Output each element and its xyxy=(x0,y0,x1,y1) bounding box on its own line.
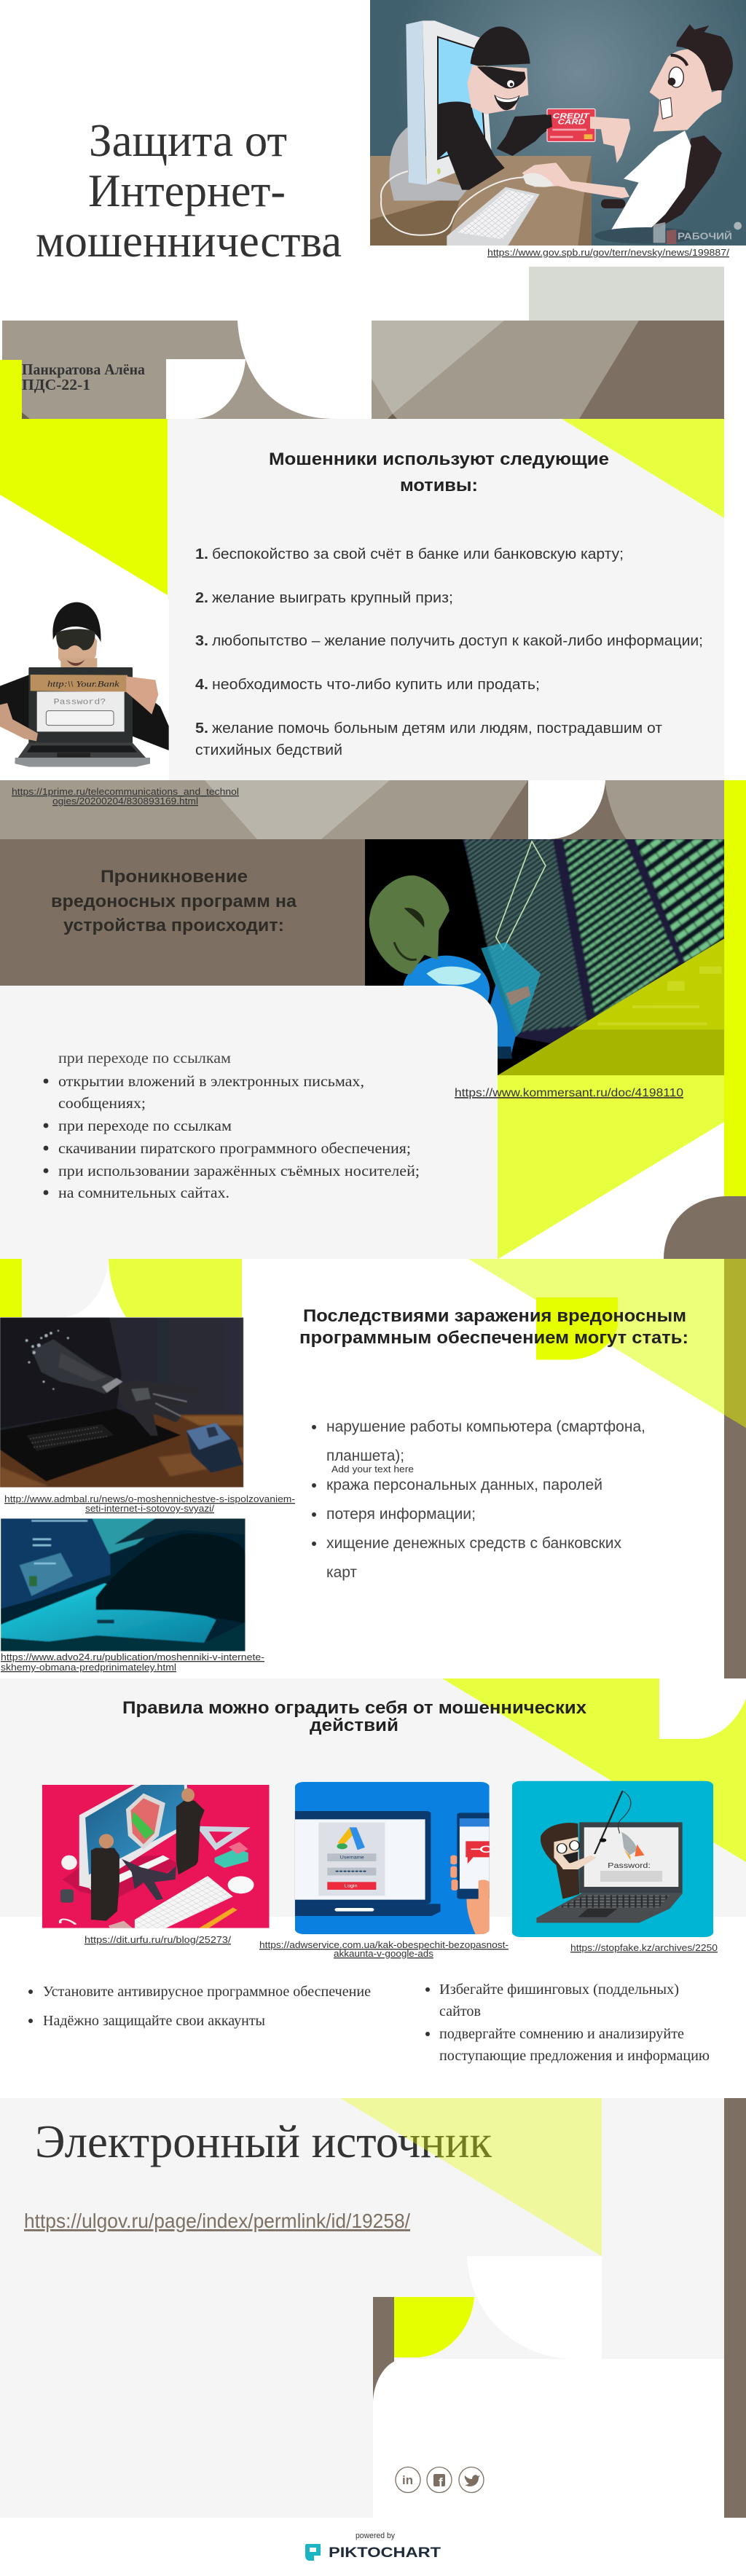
social icons xyxy=(396,2467,484,2493)
bullet list: consequences: планшета); xyxy=(326,1448,404,1464)
lime bar left xyxy=(0,1259,22,1317)
photo: hands typing on a glowing laptop xyxy=(1,1518,246,1652)
bullet list: consequences xyxy=(312,1418,645,1581)
source link: https://1prime.ru/telecommunications_and_technol xyxy=(12,786,239,797)
source link: ogies/20200204/830893169.html xyxy=(52,796,198,806)
source link: skhemy-obmana-predprinimateley.html xyxy=(1,1662,176,1673)
source link: https://ulgov.ru/page/index/permlink/id/19258/ xyxy=(24,2210,410,2232)
author name: ПДС-22-1 xyxy=(22,376,90,393)
illustration: account login on a laptop and phone: Username xyxy=(340,1855,364,1860)
photo: masked man holding a laptop: Password? xyxy=(54,699,106,707)
source links: akkaunta-v-google-ads xyxy=(334,1948,434,1959)
title: Защита от xyxy=(89,114,287,166)
bullet list: rules right xyxy=(425,1982,710,2064)
heading: motives: мотивы: xyxy=(400,476,478,495)
heading: motives: Мошенники используют следующие xyxy=(269,449,609,469)
heading: motives xyxy=(269,449,609,495)
bullet list: rules right: сайтов xyxy=(439,2003,481,2019)
source links: https://adwservice.com.ua/kak-obespechit-bezopasnost- xyxy=(259,1939,509,1950)
numbered list: motives: желание помочь больным детям или людям, пострадавшим от xyxy=(212,720,662,737)
heading: malware entry: вредоносных программ на xyxy=(51,892,297,911)
source link xyxy=(1,1652,264,1673)
heading: malware entry: Проникновение xyxy=(101,867,248,887)
photo: masked man holding a laptop: http:\\ Your.Bank xyxy=(47,679,119,689)
illustration: phishing hacker and password screen xyxy=(512,1781,713,1937)
panel: malware heading xyxy=(0,839,365,986)
photo: masked hacker at data screen xyxy=(365,839,726,1077)
source link: https://www.kommersant.ru/doc/4198110 xyxy=(455,1087,683,1099)
bullet list: ways of infection: при использовании заражённых съёмных носителей; xyxy=(58,1162,420,1179)
numbered list: motives: беспокойство за свой счёт в банке или банковскую карту; xyxy=(212,546,624,562)
heading: malware entry xyxy=(51,867,297,935)
numbered list: motives: 4. xyxy=(195,677,208,693)
brown rounded corner xyxy=(664,1196,746,1259)
numbered list: motives: 5. xyxy=(195,720,208,737)
bullet list: rules right: Избегайте фишинговых (поддельных) xyxy=(439,1982,679,1998)
brown strip right xyxy=(724,1259,746,1678)
illustration: security guards protecting a computer xyxy=(42,1785,270,1929)
bullet list: rules right: подвергайте сомнению и анализируйте xyxy=(439,2026,684,2042)
bullet list: ways of infection: при переходе по ссылкам xyxy=(58,1049,231,1067)
numbered list: motives: 1. xyxy=(195,546,208,562)
title: Интернет- xyxy=(88,165,286,216)
panel: consequences xyxy=(0,1259,746,1678)
heading: rules: Правила можно оградить себя от мошеннических xyxy=(122,1698,587,1718)
icon: facebook: f xyxy=(439,2475,443,2489)
panel: motives xyxy=(0,419,724,781)
icon: Piktochart logo xyxy=(305,2544,321,2561)
grey curved shape xyxy=(22,1259,109,1317)
photo: masked man holding a laptop xyxy=(0,600,169,781)
bullet list: ways of infection: при переходе по ссылкам xyxy=(58,1117,232,1134)
source links: https://stopfake.kz/archives/2250 xyxy=(570,1942,718,1953)
bullet list: ways of infection: открытии вложений в электронных письмах, xyxy=(58,1072,364,1090)
illustration: hacker reaching out of a monitor for a credit card xyxy=(370,0,746,246)
panel: geometric band right xyxy=(372,321,724,419)
bullet list: consequences: нарушение работы компьютера (смартфона, xyxy=(326,1418,645,1435)
panel: author band left xyxy=(0,321,335,419)
illustration: account login on a laptop and phone: •••••••• xyxy=(335,1869,366,1874)
heading: consequences: программным обеспечением могут стать: xyxy=(299,1328,688,1348)
white curved cut-out xyxy=(166,359,246,419)
lime bar right xyxy=(724,780,746,1199)
bullet list: consequences: хищение денежных средств с банковских xyxy=(326,1535,621,1552)
bullet list: rules left xyxy=(28,1984,371,2029)
bullet list: consequences: карт xyxy=(326,1564,357,1581)
wordmark: PIKTOCHART xyxy=(329,2545,441,2561)
lime triangle xyxy=(442,1678,746,1862)
lime accent bar xyxy=(0,360,22,419)
lime triangle overlay xyxy=(496,938,726,1077)
bullet list: rules right: поступающие предложения и информацию xyxy=(439,2048,710,2064)
source link xyxy=(4,1493,295,1514)
section: title xyxy=(36,0,746,267)
bullet list: rules left: Установите антивирусное программное обеспечение xyxy=(43,1984,371,2000)
icon: linkedin: in xyxy=(402,2473,413,2487)
white curved shape xyxy=(659,1678,746,1739)
source link: http://www.admbal.ru/news/o-moshennichestve-s-ispolzovaniem- xyxy=(4,1493,295,1504)
white lower panel xyxy=(0,1917,746,2098)
heading: sources: Электронный источник xyxy=(35,2116,492,2167)
lime triangle right xyxy=(562,419,724,518)
lime panel xyxy=(498,1075,724,1259)
white lower panel xyxy=(373,2359,724,2518)
grey photo fragment xyxy=(529,267,724,322)
heading: consequences xyxy=(299,1306,688,1348)
title: мошенничества xyxy=(36,215,342,267)
photo: gloved hand reaching from a laptop xyxy=(0,1317,243,1488)
illustration: hacker reaching out of a monitor for a credit card: CARD xyxy=(558,119,585,127)
lime accent shape xyxy=(536,1297,618,1359)
footer: powered by Piktochart xyxy=(305,2532,441,2561)
numbered list: motives xyxy=(195,546,703,758)
bullet list: ways of infection: скачивании пиратского программного обеспечения; xyxy=(58,1139,411,1157)
bullet list: consequences: потеря информации; xyxy=(326,1506,476,1523)
brown bar xyxy=(373,2297,394,2404)
bullet list: ways of infection xyxy=(44,1049,420,1201)
illustration: hacker reaching out of a monitor for a credit card: CREDIT xyxy=(553,112,590,120)
brown strip right xyxy=(724,2098,746,2518)
pale lime triangle xyxy=(468,1259,724,1415)
author name xyxy=(22,361,145,393)
lime curved shape xyxy=(109,1259,242,1317)
numbered list: motives: необходимость что-либо купить или продать; xyxy=(212,677,540,693)
icon: twitter xyxy=(459,2467,484,2493)
panel: protection rules xyxy=(0,1678,746,2098)
white triangle xyxy=(498,1122,724,1259)
panel: malware entry list xyxy=(0,986,746,1259)
illustration: account login on a laptop and phone xyxy=(290,1782,492,1934)
numbered list: motives: любопытство – желание получить доступ к какой-либо информации; xyxy=(212,633,703,649)
heading: rules xyxy=(122,1698,587,1735)
source link: https://www.gov.spb.ru/gov/terr/nevsky/news/199887/ xyxy=(487,247,729,258)
numbered list: motives: стихийных бедствий xyxy=(195,742,342,758)
source link xyxy=(12,786,239,806)
heading: rules: действий xyxy=(310,1716,398,1735)
heading: consequences: Последствиями заражения вредоносным xyxy=(303,1306,686,1326)
heading: malware entry: устройства происходит: xyxy=(63,916,284,935)
illustration: phishing hacker and password screen: Password: xyxy=(608,1862,651,1870)
panel: geometric band middle xyxy=(0,780,724,839)
author name: Панкратова Алёна xyxy=(22,361,145,378)
placeholder text: Add your text here xyxy=(331,1464,414,1474)
bullet list: consequences: кража персональных данных, паролей xyxy=(326,1477,602,1493)
source links: https://dit.urfu.ru/ru/blog/25273/ xyxy=(85,1934,231,1945)
source link: seti-internet-i-sotovoy-svyazi/ xyxy=(85,1503,214,1514)
title xyxy=(36,114,342,267)
numbered list: motives: желание выиграть крупный приз; xyxy=(212,590,453,606)
bullet list: rules left: Надёжно защищайте свои аккаунты xyxy=(43,2013,265,2029)
numbered list: motives: 3. xyxy=(195,633,208,649)
panel: sources xyxy=(0,2098,746,2518)
illustration: hacker reaching out of a monitor for a credit card: РАБОЧИЙ xyxy=(678,230,732,241)
pale lime triangle xyxy=(340,2098,602,2256)
numbered list: motives: 2. xyxy=(195,590,208,606)
source links xyxy=(85,1934,718,1959)
bullet list: ways of infection: на сомнительных сайтах. xyxy=(58,1184,229,1201)
source link: https://www.advo24.ru/publication/moshenniki-v-internete- xyxy=(1,1652,264,1662)
lime triangle left xyxy=(0,419,168,595)
lime curved shape xyxy=(394,2297,474,2357)
footer: powered by Piktochart: powered by xyxy=(356,2532,395,2540)
white curved shape xyxy=(467,2256,602,2359)
illustration: account login on a laptop and phone: Login xyxy=(345,1883,358,1888)
bullet list: ways of infection: сообщениях; xyxy=(58,1094,146,1112)
